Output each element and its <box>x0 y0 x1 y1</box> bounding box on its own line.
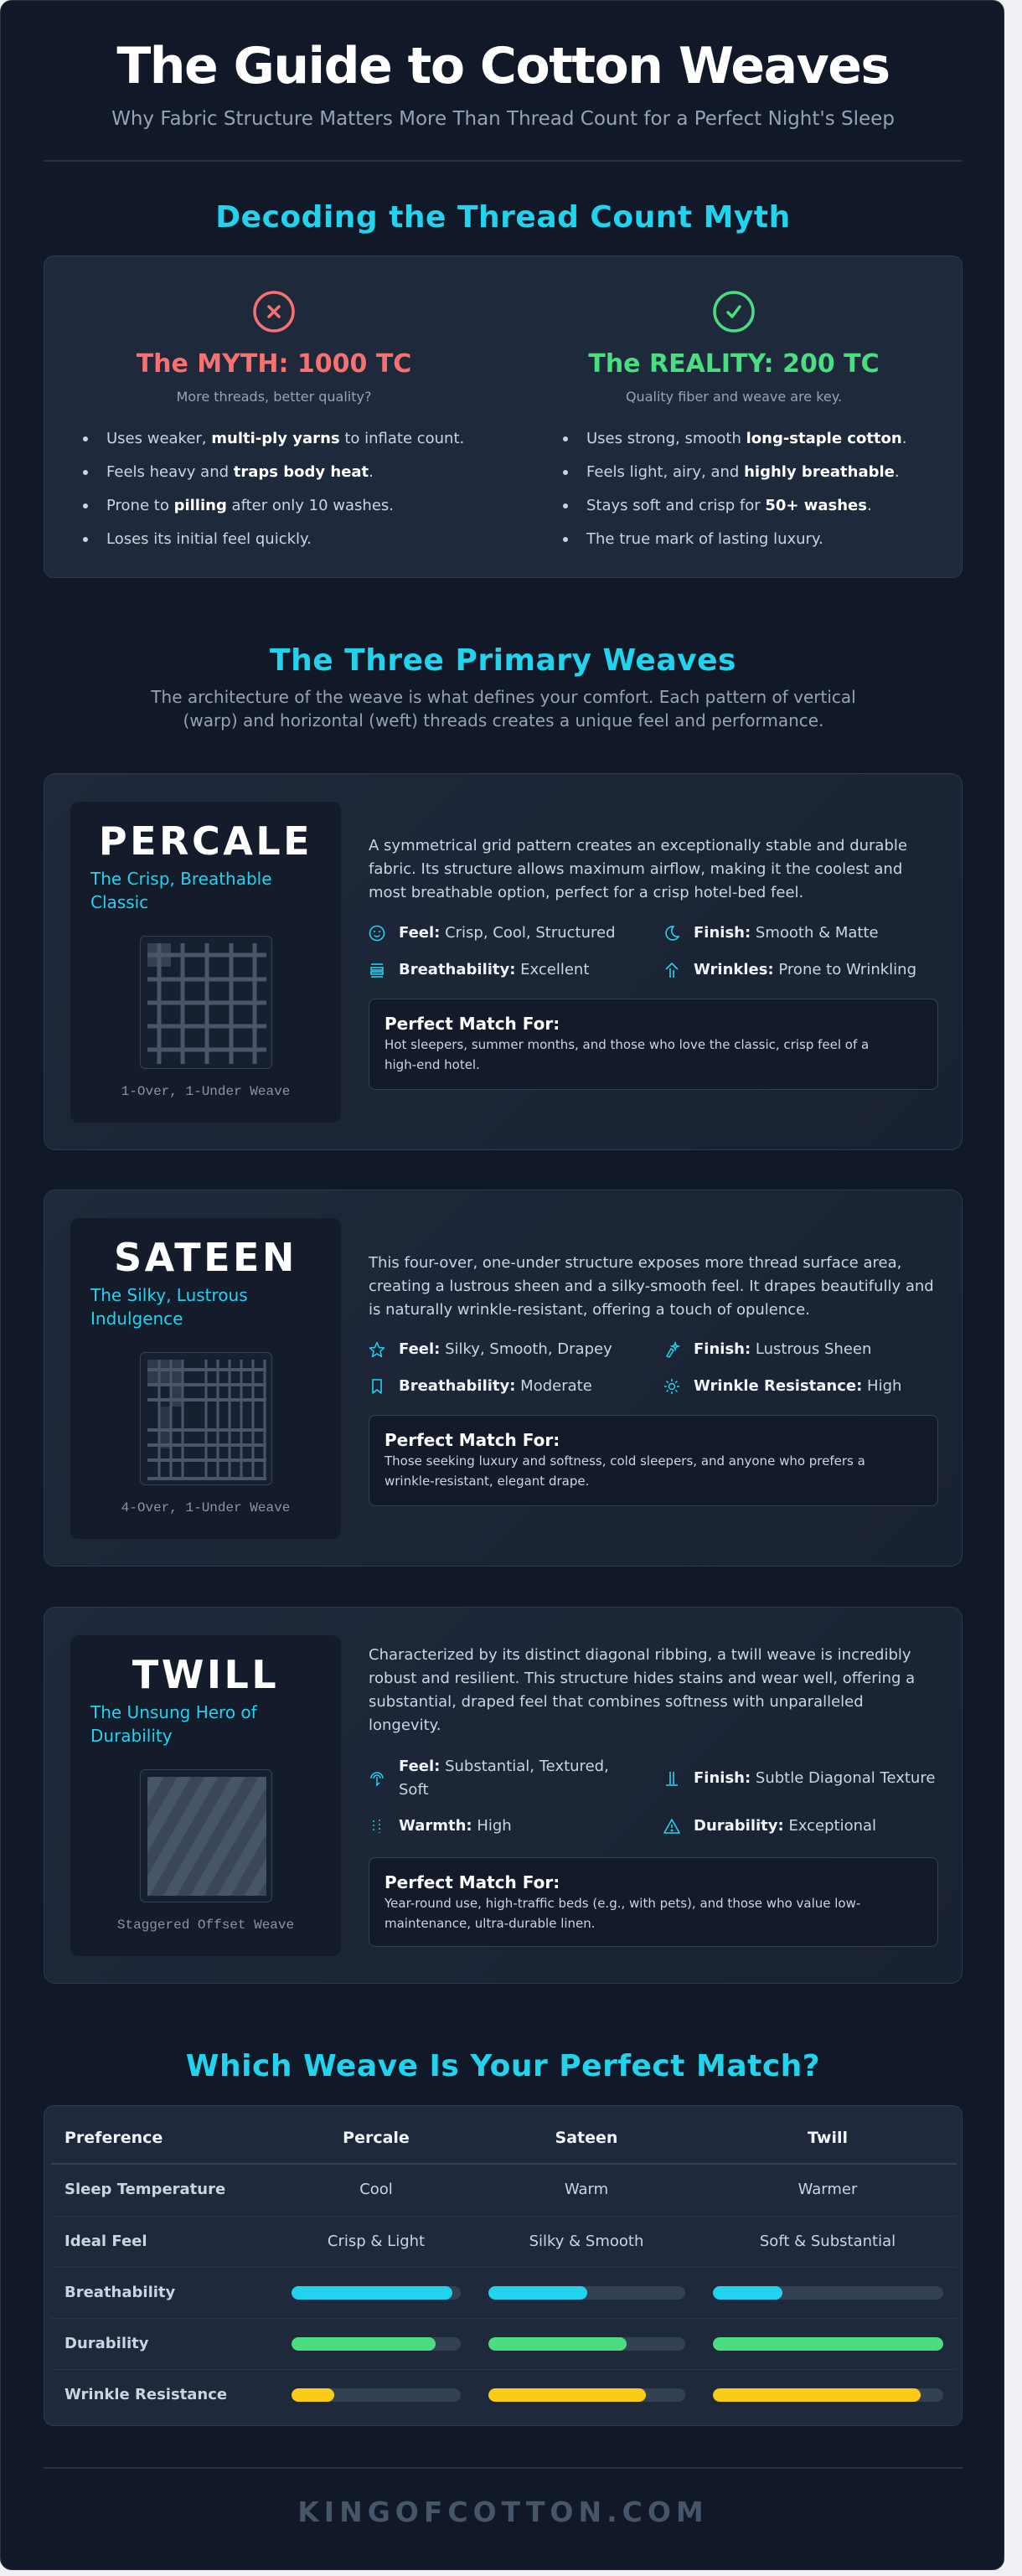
myth bullets <box>83 430 464 548</box>
sateen perfect match: Perfect Match For: <box>385 1430 560 1450</box>
row: ideal feel: Silky & Smooth <box>529 2233 643 2250</box>
twill perfect match: Perfect Match For: <box>385 1872 560 1892</box>
sateen description: This four-over, one-under structure exposes more thread surface area, creating a lustrous sheen and a silky-smooth feel. It drapes beautifully and is naturally wrinkle-resistant, offering a touch of opulence. <box>369 1254 934 1319</box>
comparison table <box>44 2105 963 2426</box>
percale perfect match <box>369 999 938 1090</box>
row: sleep temperature <box>65 2181 858 2198</box>
reality bullets: The true mark of lasting luxury. <box>586 530 823 548</box>
row: ideal feel: Soft & Substantial <box>760 2233 896 2250</box>
icon: check circle <box>713 291 755 333</box>
twill perfect match <box>369 1857 938 1947</box>
reality bullets: Feels light, airy, and highly breathable. <box>586 463 900 481</box>
title: The Guide to Cotton Weaves <box>116 37 890 96</box>
feature: finish: Finish: Subtle Diagonal Texture <box>694 1769 935 1787</box>
panel: twill <box>44 1607 963 1984</box>
sateen identity box: SATEEN <box>114 1235 297 1280</box>
table header: Sateen <box>555 2129 617 2147</box>
table header: Twill <box>808 2129 848 2147</box>
reality heading: The REALITY: 200 TC <box>588 349 880 379</box>
row: breathability bars: Breathability <box>65 2284 175 2301</box>
heading: perfect match: Which Weave Is Your Perfect Match? <box>186 2049 820 2083</box>
sateen weave graphic <box>140 1352 272 1485</box>
sateen identity box: 4-Over, 1-Under Weave <box>121 1500 290 1515</box>
twill weave graphic <box>140 1769 272 1902</box>
reality column <box>563 291 906 548</box>
feature: wrinkle resistance: Wrinkle Resistance: High <box>694 1377 901 1395</box>
icon: x circle <box>253 291 295 333</box>
twill description: Characterized by its distinct diagonal ribbing, a twill weave is incredibly robust and resilient. This structure hides stains and wear well, offering a substantial, draped feel that combines softness with unparalleled longevity. <box>369 1646 915 1734</box>
row: durability bars: Durability <box>65 2335 149 2352</box>
panel: sateen <box>44 1190 963 1567</box>
feature: breathability: Breathability: Excellent <box>399 961 589 978</box>
sateen identity box <box>70 1218 341 1539</box>
percale identity box: The Crisp, Breathable Classic <box>90 869 272 912</box>
twill identity box <box>70 1635 341 1956</box>
sateen perfect match: Those seeking luxury and softness, cold sleepers, and anyone who prefers a wrinkle-resistant, elegant drape. <box>385 1453 865 1489</box>
sateen perfect match <box>369 1415 938 1506</box>
twill identity box: The Unsung Hero of Durability <box>90 1702 257 1746</box>
percale identity box: PERCALE <box>99 818 312 864</box>
row: sleep temperature: Cool <box>359 2181 393 2198</box>
heading: three weaves: The Three Primary Weaves <box>270 643 736 678</box>
feature: wrinkles: Wrinkles: Prone to Wrinkling <box>694 961 916 978</box>
reality bullets: Stays soft and crisp for 50+ washes. <box>586 497 872 514</box>
twill identity box: TWILL <box>132 1652 279 1697</box>
row: sleep temperature: Sleep Temperature <box>65 2181 225 2198</box>
footer brand: KINGOFCOTTON.COM <box>297 2496 709 2528</box>
myth column <box>83 291 464 548</box>
myth bullets: Feels heavy and traps body heat. <box>106 463 374 481</box>
percale perfect match: Hot sleepers, summer months, and those who love the classic, crisp feel of a high-end hotel. <box>385 1037 869 1072</box>
myth heading: The MYTH: 1000 TC <box>137 349 411 379</box>
percale identity box: 1-Over, 1-Under Weave <box>121 1084 290 1099</box>
feature: warmth: Warmth: High <box>399 1817 512 1835</box>
sateen identity box: The Silky, Lustrous Indulgence <box>90 1285 248 1329</box>
reality bullets <box>563 430 906 548</box>
myth bullets: Uses weaker, multi-ply yarns to inflate count. <box>106 430 464 447</box>
intro text: The architecture of the weave is what defines your comfort. Each pattern of vertical (warp) and horizontal (weft) threads creates a unique feel and performance. <box>151 687 856 730</box>
percale identity box <box>70 802 341 1123</box>
percale description: A symmetrical grid pattern creates an exceptionally stable and durable fabric. Its structure allows maximum airflow, making it the coolest and most breathable option, perfect for a crisp hotel-bed feel. <box>369 837 907 901</box>
percale perfect match: Perfect Match For: <box>385 1014 560 1034</box>
feature: feel: Feel: Silky, Smooth, Drapey <box>399 1340 612 1358</box>
row: sleep temperature: Warmer <box>798 2181 857 2198</box>
feature: finish: Finish: Lustrous Sheen <box>694 1340 871 1358</box>
subtitle: Why Fabric Structure Matters More Than Thread Count for a Perfect Night's Sleep <box>111 108 895 130</box>
table header <box>65 2129 848 2147</box>
row: ideal feel: Crisp & Light <box>328 2233 425 2250</box>
myth bullets: Prone to pilling after only 10 washes. <box>106 497 394 514</box>
percale weave graphic <box>140 936 272 1069</box>
feature: breathability: Breathability: Moderate <box>399 1377 592 1395</box>
feature: durability: Durability: Exceptional <box>694 1817 876 1835</box>
panel: myth vs reality <box>44 256 963 578</box>
reality bullets: Uses strong, smooth long-staple cotton. <box>586 430 906 447</box>
twill perfect match: Year-round use, high-traffic beds (e.g., with pets), and those who value low-maintenance, ultra-durable linen. <box>385 1896 860 1931</box>
feature: finish: Finish: Smooth & Matte <box>694 924 879 942</box>
myth column: More threads, better quality? <box>176 389 371 405</box>
table header: Preference <box>65 2129 163 2147</box>
row: wrinkle resistance bars: Wrinkle Resistance <box>65 2386 227 2403</box>
heading: thread count myth: Decoding the Thread Count Myth <box>215 200 791 235</box>
feature: feel: Feel: Crisp, Cool, Structured <box>399 924 615 942</box>
myth bullets: Loses its initial feel quickly. <box>106 530 312 548</box>
row: durability bars <box>51 2318 957 2369</box>
feature: feel: Feel: Substantial, Textured, Soft <box>399 1758 609 1799</box>
reality column: Quality fiber and weave are key. <box>626 389 842 405</box>
row: wrinkle resistance bars <box>51 2369 957 2420</box>
row: sleep temperature: Warm <box>565 2181 608 2198</box>
row: breathability bars <box>51 2267 957 2318</box>
table header: Percale <box>343 2129 410 2147</box>
row: ideal feel: Ideal Feel <box>65 2233 147 2250</box>
panel: percale <box>44 773 963 1150</box>
twill identity box: Staggered Offset Weave <box>117 1918 294 1933</box>
row: ideal feel <box>51 2216 957 2267</box>
